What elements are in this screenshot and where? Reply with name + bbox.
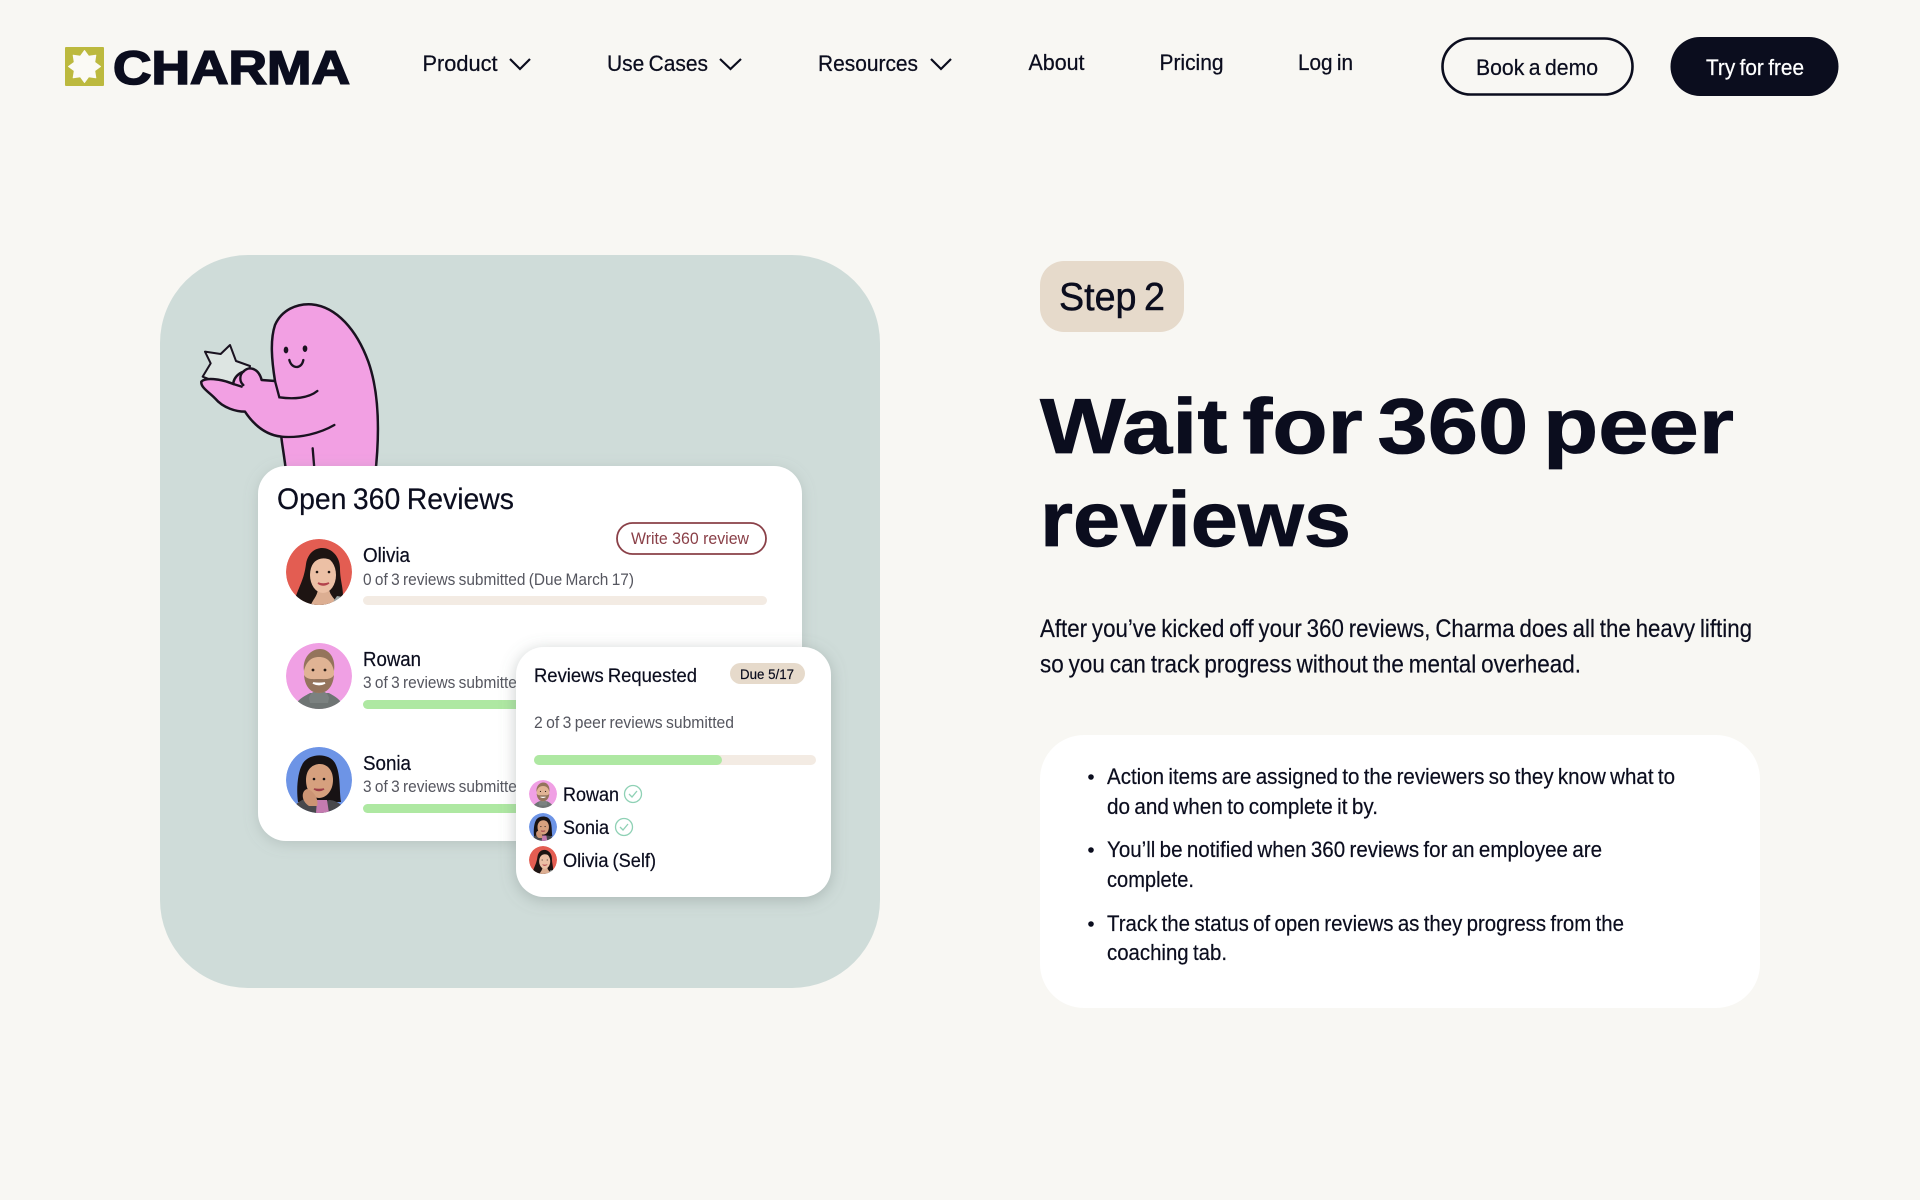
bullet 2: complete. xyxy=(1107,867,1194,892)
avatar: Rowan xyxy=(286,643,352,709)
badge: Step 2: Step 2 xyxy=(1059,276,1165,319)
intro paragraph: so you can track progress without the mental overhead. xyxy=(1040,650,1581,678)
heading: reviews xyxy=(1040,475,1351,563)
intro paragraph: After you’ve kicked off your 360 reviews, Charma does all the heavy lifting xyxy=(1040,615,1752,643)
card title: Open 360 Reviews xyxy=(277,483,514,516)
bullet 3: Track the status of open reviews as they progress from the xyxy=(1107,911,1624,936)
bullet 2: You’ll be notified when 360 reviews for an employee are xyxy=(1107,837,1602,862)
reviewer: Olivia (Self) xyxy=(529,846,656,874)
button: Try for free xyxy=(1670,37,1838,96)
panel background xyxy=(160,255,880,988)
button: Book a demo: Book a demo xyxy=(1476,55,1598,80)
bullet 1: Action items are assigned to the reviewers so they know what to xyxy=(1107,764,1675,789)
nav item: Use Cases: Use Cases xyxy=(607,51,708,76)
bullet 3 xyxy=(1088,911,1624,965)
reviewer: Sonia: Sonia xyxy=(563,818,609,839)
avatar: Sonia xyxy=(286,747,352,813)
row: Rowan xyxy=(286,643,767,709)
name: Rowan: Rowan xyxy=(363,649,421,671)
badge: Due 5/17 xyxy=(730,663,805,684)
panel: product illustration xyxy=(160,255,880,988)
card background xyxy=(516,647,831,897)
status: Olivia: 0 of 3 reviews submitted (Due March 17) xyxy=(363,571,634,589)
bullet 1 xyxy=(1088,764,1675,819)
button: Write 360 review: Write 360 review xyxy=(631,530,749,548)
reviewer: Rowan: Rowan xyxy=(563,785,619,806)
reviewer: Rowan xyxy=(529,780,642,808)
nav item: Log in: Log in xyxy=(1298,50,1353,75)
row: Sonia xyxy=(286,747,767,813)
bullet 2 xyxy=(1088,837,1602,892)
card: Reviews Requested xyxy=(516,647,831,897)
progress bar xyxy=(534,755,816,765)
nav item: Resources: Resources xyxy=(818,51,918,76)
reviewer: Sonia xyxy=(529,813,632,841)
logo xyxy=(65,41,350,94)
panel: bullet list xyxy=(1040,735,1760,1008)
name: Sonia: Sonia xyxy=(363,753,412,775)
card: Open 360 Reviews xyxy=(258,466,802,841)
bullet 3: coaching tab. xyxy=(1107,940,1227,965)
progress bar: Sonia xyxy=(363,804,767,813)
navigation bar xyxy=(65,37,1838,96)
status text: 2 of 3 peer reviews submitted xyxy=(534,714,734,732)
intro paragraph xyxy=(1040,615,1752,678)
card title: Reviews Requested xyxy=(534,665,697,687)
progress bar: Rowan xyxy=(363,700,767,709)
nav item: Product: Product xyxy=(422,51,498,76)
card background xyxy=(258,466,802,841)
progress bar: Olivia xyxy=(363,596,767,605)
button: Try for free: Try for free xyxy=(1706,55,1804,80)
badge: Due 5/17: Due 5/17 xyxy=(740,666,794,682)
heading: Wait for 360 peer xyxy=(1040,382,1734,470)
logo wordmark: CHARMA xyxy=(113,41,350,94)
status: Rowan: 3 of 3 reviews submitted (Due March 17) xyxy=(363,674,634,692)
heading xyxy=(1040,382,1734,563)
nav item: Pricing: Pricing xyxy=(1160,50,1224,75)
status: Sonia: 3 of 3 reviews submitted (Due March 17) xyxy=(363,778,634,796)
button: Book a demo xyxy=(1442,38,1632,94)
logo mark xyxy=(65,47,104,86)
list background xyxy=(1040,735,1760,1008)
nav item: About: About xyxy=(1028,50,1085,75)
avatar: Olivia xyxy=(286,539,352,605)
reviewer: Olivia (Self): Olivia (Self) xyxy=(563,851,656,872)
button: Write 360 review xyxy=(617,523,766,554)
row: Olivia xyxy=(286,539,767,605)
name: Olivia: Olivia xyxy=(363,545,411,567)
illustration: pink character holding star xyxy=(201,304,378,477)
bullet 1: do and when to complete it by. xyxy=(1107,794,1378,819)
badge: Step 2 xyxy=(1040,261,1184,332)
